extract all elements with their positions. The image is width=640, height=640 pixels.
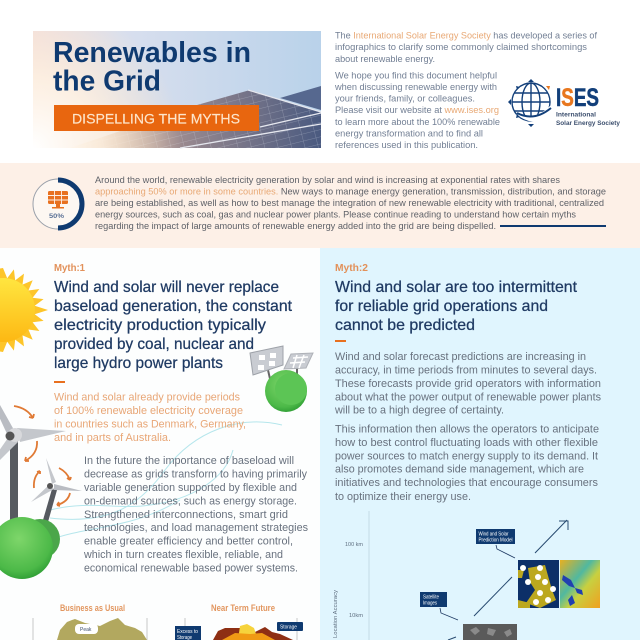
- myth 1 heading: baseload generation, the constant: [54, 298, 293, 315]
- chart: near term future: [175, 603, 303, 640]
- chart: forecast accuracy: 10km: [349, 613, 363, 619]
- chart: business as usual: Business as Usual: [60, 603, 125, 614]
- myth 1 body text: enable greater efficiency and better control,: [84, 536, 293, 548]
- intro text: about the infographics: infographics to clarify some commonly claimed shortcomings: [335, 42, 587, 52]
- chart: forecast accuracy: 100 km: [345, 542, 363, 548]
- myth 1 answer: and in parts of Australia.: [54, 432, 171, 444]
- arrow: upper trend: [535, 520, 568, 553]
- chart: forecast accuracy: Location Accuracy: [333, 590, 339, 638]
- icon: 50% solar gauge: 50%: [49, 213, 64, 220]
- myth 1 heading: provided by coal, nuclear and: [54, 336, 254, 353]
- myth 1 heading: [54, 279, 293, 372]
- myth 2 body text: demand: This information then allows the operators to anticipate: [335, 424, 599, 436]
- subtitle banner: DISPELLING THE MYTHS: [72, 112, 240, 126]
- myth 2 heading: [335, 279, 578, 334]
- panel: myth 1: [0, 248, 320, 640]
- myth 1 body text: decrease as grids transform to having primarily: [84, 468, 308, 480]
- myth 1 body text: [83, 455, 308, 574]
- myth 1 answer: in countries such as Denmark, Germany,: [54, 418, 246, 430]
- chart: near term future: Storage: [280, 624, 297, 630]
- map: forecast sites: [518, 560, 559, 608]
- introduction text: are being established, as well as how to best manage the integration of new renewable electricity with traditional, centralized: [95, 198, 604, 208]
- myth 1 body text: on-demand sources, such as energy storage.: [84, 496, 297, 508]
- icon: small wind turbine: [31, 458, 82, 522]
- intro text: about the infographics: [335, 30, 597, 64]
- myth 1 body text: which in turn creates flexible, reliable, and: [83, 549, 283, 561]
- title: [53, 37, 251, 98]
- myth 1 heading: electricity production typically: [54, 317, 266, 334]
- intro text: website invitation: [334, 70, 500, 150]
- callout: satellite images: Satellite: [423, 594, 439, 600]
- intro text: website invitation: energy transformation and to find all: [335, 128, 483, 138]
- logo: ISES: [508, 79, 620, 127]
- myth 1 answer: of 100% renewable electricity coverage: [54, 405, 243, 417]
- myth 2 body text: forecasts: These forecasts provide grid operators with information: [335, 378, 601, 390]
- intro text: website invitation: We hope you find this document helpful: [335, 70, 497, 80]
- myth 1 answer: Wind and solar already provide periods: [54, 392, 240, 404]
- chart: forecast accuracy: [333, 511, 600, 640]
- myth 1 body text: variable generation supported by flexible and: [84, 482, 297, 494]
- panel: introduction band: [0, 163, 640, 248]
- title: Renewables in: [53, 37, 251, 69]
- map: weather heat map: [560, 560, 600, 608]
- icon: turbine rotation arrows: [14, 406, 71, 506]
- arrow: lower trend: [474, 577, 512, 616]
- myth 2 body text: demand: power sources to match energy supply to its demand. It: [335, 450, 598, 462]
- myth 2 body text: demand: also promotes demand side management, which are: [335, 464, 584, 476]
- intro text: website invitation: your friends, family, or colleagues.: [335, 94, 475, 104]
- myth 1 body text: Strengthened interconnections, smart grid: [84, 509, 288, 521]
- introduction text: regarding the impact of large amounts of renewable energy added into the grid are being dispelled.: [95, 221, 496, 231]
- icon: turbine globe: [0, 517, 60, 579]
- myth 2 heading: cannot be predicted: [335, 317, 475, 334]
- myth 2 body text: forecasts: Wind and solar forecast predictions are increasing in: [335, 351, 586, 363]
- decorative wind lines: [50, 422, 282, 540]
- myth 1 heading: Wind and solar will never replace: [54, 279, 279, 296]
- myth 2 body text: demand: initiatives and technologies that encourage consumers: [335, 477, 598, 489]
- panel: header image: [33, 31, 321, 148]
- logo: ISES: ISES: [556, 84, 599, 112]
- myth 1 body text: In the future the importance of baseload will: [84, 455, 294, 467]
- myth 1 label: Myth:1: [54, 262, 85, 274]
- intro text: website invitation: when discussing renewable energy with: [334, 82, 497, 92]
- myth 1 heading: large hydro power plants: [54, 355, 223, 372]
- myth 2 label: Myth:2: [335, 262, 368, 274]
- title: the Grid: [53, 66, 161, 98]
- myth 1 body text: technologies, and load management strategies: [84, 522, 308, 534]
- myth 2 body text: forecasts: will be to a high degree of certainty.: [334, 404, 504, 416]
- introduction text: approaching 50% or more in some countries. New ways to manage energy generation, transmission, distribution, and storage: [95, 186, 606, 196]
- logo: ISES: International: [556, 112, 596, 118]
- intro text: website invitation: references used in this publication.: [335, 140, 478, 150]
- icon: 50% solar gauge: [33, 179, 83, 229]
- satellite image: [463, 624, 517, 640]
- callout: prediction model: [476, 529, 515, 558]
- callout: prediction model: Prediction Model: [478, 538, 512, 544]
- callout: satellite images: Images: [423, 600, 437, 606]
- icon: large wind turbine: [0, 396, 66, 523]
- arrow: bottom trend: [448, 637, 456, 640]
- chart: business as usual: Peak: [80, 627, 92, 633]
- introduction text: [95, 175, 606, 231]
- chart: near term future: Near Term Future: [211, 603, 275, 614]
- introduction text: energy sources, such as coal, gas and nuclear power plants. Please continue reading to understand how certain myths: [95, 210, 576, 220]
- subtitle banner: [54, 105, 259, 131]
- myth 2 body text: forecasts: accuracy, in time periods from minutes to several days.: [335, 364, 597, 376]
- myth 2 heading: for reliable grid operations and: [335, 298, 548, 315]
- logo: ISES: Solar Energy Society: [556, 120, 620, 127]
- chart: near term future: Excess to: [177, 629, 198, 635]
- intro text: website invitation: to learn more about the 100% renewable: [335, 117, 500, 127]
- myth 2 body text: demand: how to best control fluctuating loads with other flexible: [335, 437, 598, 449]
- myth 1 answer: [54, 392, 246, 444]
- intro text: website invitation: Please visit our website at www.ises.org: [335, 105, 499, 115]
- panel: myth 2: [320, 248, 640, 640]
- myth 2 body text: demand: [335, 424, 599, 503]
- myth 2 body text: demand: to optimize their energy use.: [335, 491, 471, 503]
- icon: sun: [0, 268, 48, 352]
- introduction text: Around the world, renewable electricity generation by solar and wind is increasing at exponential rates with shares: [95, 175, 560, 185]
- myth 2 body text: forecasts: [334, 351, 601, 416]
- intro text: about the infographics: about renewable energy.: [335, 54, 435, 64]
- myth 2 body text: forecasts: about what the power output of renewable power plants: [335, 392, 601, 404]
- myth 2 heading: Wind and solar are too intermittent: [335, 279, 578, 296]
- callout: prediction model: Wind and Solar: [478, 532, 509, 538]
- intro text: about the infographics: The International Solar Energy Society has developed a series of: [335, 30, 597, 40]
- callout: satellite images: [420, 592, 458, 620]
- myth 1 body text: economical renewable based power systems.: [84, 562, 298, 574]
- chart: business as usual: [33, 603, 147, 640]
- icon: solar panels on globe: [250, 346, 313, 412]
